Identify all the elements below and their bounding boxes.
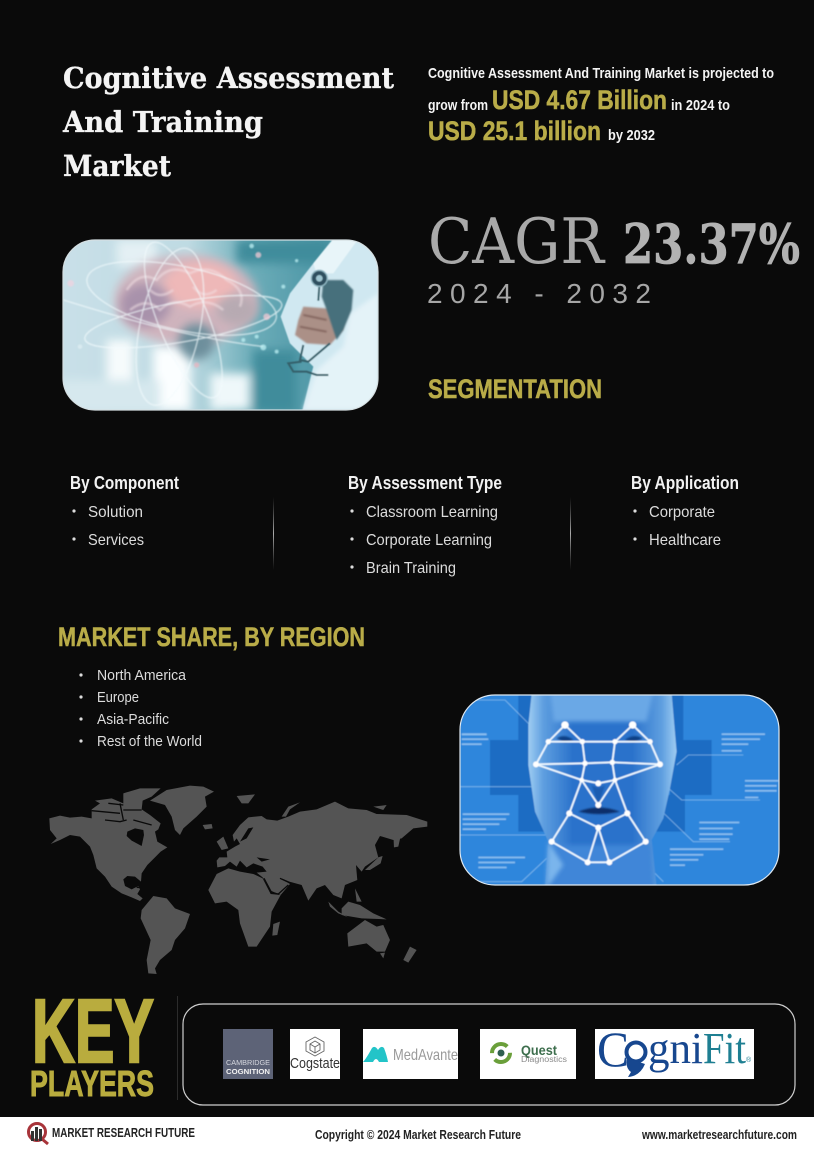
logo: Cambridge Cognition — [223, 1029, 273, 1079]
heading: key players: KEY — [32, 982, 154, 1082]
logo: Cogstate: Cogstate — [290, 1055, 340, 1072]
logo: Quest Diagnostics: Diagnostics — [521, 1055, 567, 1064]
footer — [0, 1117, 814, 1150]
logo: MedAvante: MedAvante — [393, 1047, 458, 1064]
panel: key player logos — [183, 1004, 795, 1105]
logo: CogniFit: gni — [648, 1024, 703, 1073]
market projection text: in 2024 to — [671, 97, 730, 114]
image border: face — [460, 695, 779, 885]
CAGR figure: CAGR — [428, 205, 605, 278]
column: by component: By Component — [70, 473, 179, 493]
logo: Quest Diagnostics: Quest — [521, 1042, 557, 1058]
column: by assessment type: By Assessment Type — [348, 473, 502, 493]
title: Market — [63, 149, 172, 183]
title: And Training — [62, 105, 263, 139]
image: facial recognition mesh — [460, 693, 780, 888]
heading: key players: PLAYERS — [30, 1063, 154, 1104]
heading: key players — [30, 982, 154, 1104]
column: by component: Services — [88, 532, 144, 549]
column: by assessment type — [348, 473, 502, 577]
logo: CogniFit: C — [597, 1021, 629, 1077]
logo: Cambridge Cognition: CAMBRIDGE — [226, 1058, 270, 1067]
logo: Cogstate — [290, 1029, 340, 1079]
column: by application: Healthcare — [649, 532, 721, 549]
column: by assessment type: Brain Training — [366, 560, 456, 577]
CAGR figure: 2024 - 2032 — [427, 278, 651, 309]
footer logo icon — [28, 1124, 48, 1144]
market projection text: USD 25.1 billion — [428, 116, 601, 146]
column: by component: Solution — [88, 504, 143, 521]
region list: Rest of the World — [97, 733, 202, 750]
column: by assessment type: Classroom Learning — [366, 504, 498, 521]
title: Cognitive Assessment — [63, 61, 395, 95]
market projection text: grow from — [428, 97, 488, 114]
region list: Europe — [97, 689, 139, 706]
market projection text: USD 4.67 Billion — [492, 85, 667, 115]
column: by application: By Application — [631, 473, 739, 493]
logo: CogniFit: ® — [746, 1056, 752, 1064]
logo: MedAvante — [363, 1029, 458, 1079]
market projection text: by 2032 — [608, 127, 655, 144]
image border: brain — [63, 240, 378, 410]
logo: Cambridge Cognition: COGNITION — [226, 1067, 270, 1076]
heading: market share by region: MARKET SHARE, BY REGION — [58, 622, 365, 652]
title — [62, 61, 395, 183]
column: by assessment type: Corporate Learning — [366, 532, 492, 549]
column: by component — [70, 473, 179, 549]
heading: segmentation: SEGMENTATION — [428, 374, 602, 404]
logo: CogniFit: Fit — [703, 1024, 746, 1073]
image: brain and doctor — [60, 233, 383, 413]
logo: CogniFit — [595, 1021, 754, 1079]
world map — [49, 786, 427, 974]
footer: Copyright © 2024 Market Research Future — [315, 1127, 521, 1142]
footer: MARKET RESEARCH FUTURE — [52, 1125, 195, 1140]
logo: Quest Diagnostics — [480, 1029, 576, 1079]
column: by application — [631, 473, 739, 549]
region list: Asia-Pacific — [97, 711, 169, 728]
region list: North America — [97, 667, 187, 684]
column: by application: Corporate — [649, 504, 715, 521]
CAGR figure — [427, 205, 800, 309]
region list — [79, 667, 202, 750]
market projection text — [428, 65, 774, 146]
